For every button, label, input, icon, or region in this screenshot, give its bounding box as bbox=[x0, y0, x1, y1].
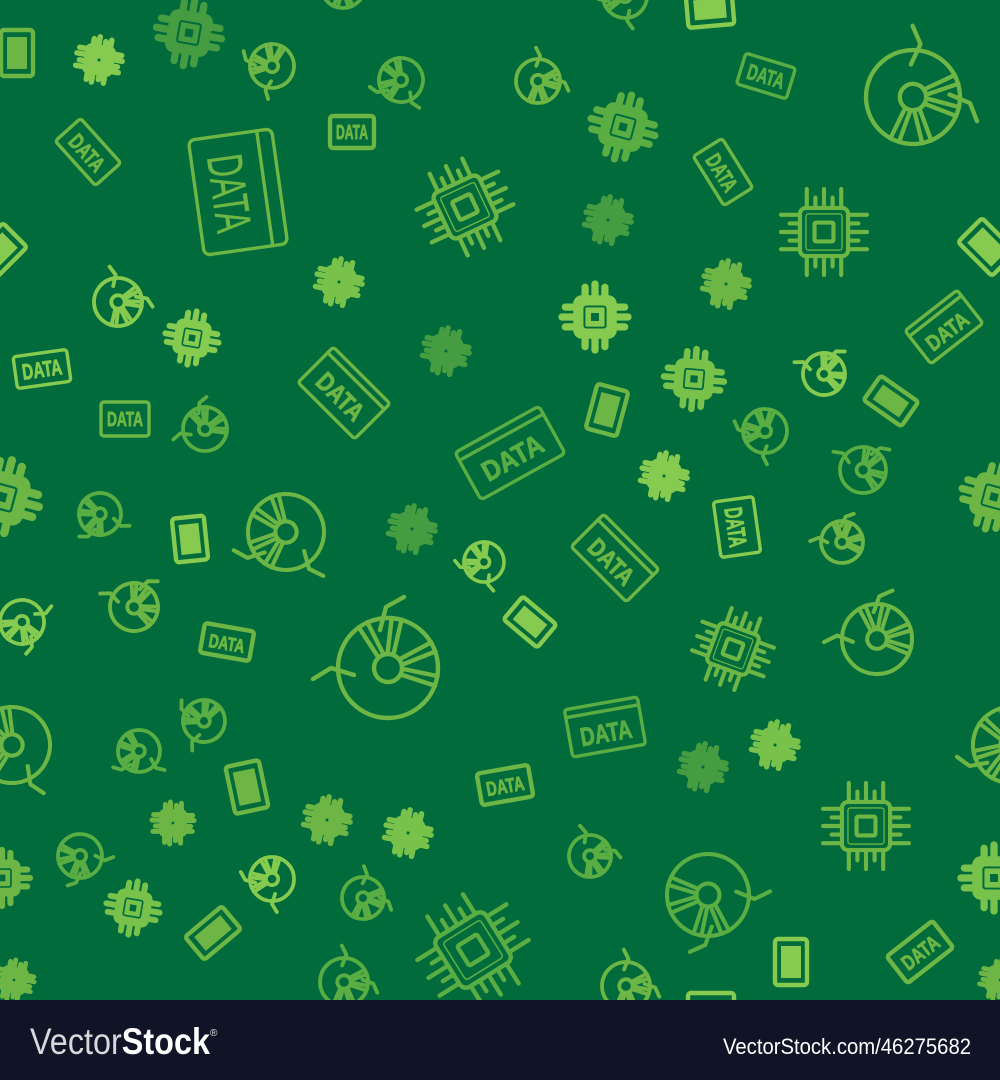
icon: solid card 6 bbox=[225, 760, 269, 814]
icon: small data window lower left bbox=[200, 623, 254, 661]
icon: data window vertical: DATA bbox=[718, 506, 752, 549]
icon: disc bottom right bbox=[662, 851, 773, 958]
footer registered mark: ® bbox=[210, 1028, 218, 1039]
icon: small disc 21 bbox=[600, 948, 663, 1013]
icon: tiny chip 4 bbox=[699, 257, 753, 311]
icon: chip right bbox=[781, 189, 867, 275]
icon: tiny chip 12 bbox=[748, 718, 802, 772]
icon: small disc top edge 1 bbox=[592, 0, 650, 32]
icon: data window lower centre: DATA bbox=[578, 714, 634, 752]
icon: small disc 1 bbox=[233, 37, 299, 104]
icon: data window right: DATA bbox=[921, 307, 974, 356]
icon: tiny chip 11 bbox=[676, 740, 730, 794]
icon: small disc 3 bbox=[514, 46, 572, 106]
icon: data window vertical bbox=[713, 496, 761, 558]
icon: chip bottom centre bbox=[401, 878, 545, 1022]
icon: filled chip left edge bbox=[0, 450, 49, 544]
icon: tiny chip 1 bbox=[72, 33, 126, 87]
icon: chip centre top bbox=[405, 147, 525, 267]
icon: data window lower centre bbox=[564, 697, 646, 757]
icon: solid card 9 bbox=[686, 0, 734, 28]
footer bar bbox=[0, 1000, 1000, 1080]
icon: small disc 20 bbox=[318, 944, 381, 1009]
icon: small data window upper: DATA bbox=[336, 122, 368, 144]
icon: chip middle right bbox=[684, 600, 782, 698]
icon: filled chip bottom left bbox=[102, 877, 164, 939]
icon: filled chip lower left edge bbox=[0, 850, 30, 906]
icon: small data window top: DATA bbox=[744, 59, 788, 94]
icon: solid card 7 bbox=[185, 906, 241, 960]
icon: wide data window centre: DATA bbox=[476, 428, 549, 487]
icon: tiny chip 5 bbox=[419, 324, 473, 378]
icon: small disc 15 bbox=[103, 721, 176, 794]
icon: small disc 14 bbox=[162, 688, 233, 759]
icon: solid card 4 bbox=[172, 515, 208, 563]
icon: tiny chip 2 bbox=[312, 255, 366, 309]
icon: small disc 18 bbox=[339, 863, 398, 924]
icon: disc right bbox=[822, 585, 916, 677]
icon: tiny chip 6 bbox=[385, 502, 439, 556]
icon: small data window bottom right: DATA bbox=[897, 931, 945, 975]
icon: solid card 5 bbox=[864, 376, 918, 426]
icon: filled chip centre right bbox=[661, 346, 727, 412]
icon: large outlined data window bbox=[188, 129, 288, 255]
icon: small disc 8 bbox=[822, 423, 902, 502]
icon: small disc 17 bbox=[241, 857, 294, 912]
icon: small disc 19 bbox=[564, 820, 623, 880]
icon: small disc 10 bbox=[91, 559, 172, 640]
icon: data window right bbox=[905, 290, 983, 364]
icon: small disc 7 bbox=[731, 406, 789, 466]
icon: small disc 12 bbox=[453, 539, 509, 596]
icon: solid card 11 bbox=[0, 223, 27, 281]
icon: data window middle: DATA bbox=[582, 533, 640, 591]
icon: small disc 6 bbox=[786, 332, 857, 403]
icon: solid card 3 bbox=[586, 384, 628, 436]
icon: small data window mid left bbox=[101, 402, 149, 436]
icon: disc centre left bbox=[220, 480, 348, 609]
icon: solid card 12 bbox=[688, 993, 734, 1023]
icon: tiny chip 10 bbox=[381, 806, 435, 860]
icon: small disc top edge 2 bbox=[319, 0, 377, 11]
icon: filled chip lower right edge bbox=[961, 845, 1000, 911]
icon: small data window lower left: DATA bbox=[207, 631, 246, 658]
icon: tiny chip 7 bbox=[637, 449, 691, 503]
icon: small data window bottom right bbox=[887, 921, 953, 983]
icon: tiny chip 14 bbox=[976, 956, 1000, 1004]
icon: solid card 2 bbox=[504, 596, 556, 648]
icon: small data window left: DATA bbox=[21, 354, 64, 385]
icon: filled chip right edge bbox=[954, 457, 1000, 537]
icon: small data window mid left: DATA bbox=[107, 409, 143, 431]
icon: small disc 2 bbox=[363, 51, 435, 123]
icon: small data window bottom: DATA bbox=[485, 773, 526, 801]
icon: filled chip centre bbox=[562, 284, 628, 350]
icon: small data window upper bbox=[330, 116, 374, 148]
icon: tiny chip 3 bbox=[581, 193, 635, 247]
icon: data window top left: DATA bbox=[64, 129, 110, 177]
icon: data window left centre bbox=[298, 347, 390, 439]
icon: large disc centre bbox=[313, 597, 438, 718]
icon: small data window top bbox=[736, 53, 796, 99]
icon: data window top right: DATA bbox=[701, 149, 743, 196]
icon: small disc 9 bbox=[67, 485, 138, 556]
icon: large outlined data window: DATA bbox=[196, 151, 262, 236]
icon: solid card 10 bbox=[958, 218, 1000, 276]
footer image id: VectorStock.com/46275682 bbox=[723, 1034, 971, 1059]
icon: filled chip left bbox=[161, 307, 223, 369]
icon: data window middle bbox=[571, 514, 659, 602]
icon: small disc 4 bbox=[91, 263, 154, 328]
icon: solid card 1 bbox=[1, 30, 33, 76]
icon: small disc 11 bbox=[0, 590, 64, 659]
icon: filled chip top left bbox=[151, 0, 227, 71]
icon: filled chip top bbox=[583, 87, 663, 167]
icon: tiny chip 13 bbox=[0, 956, 38, 1004]
icon: small disc 13 bbox=[807, 507, 868, 566]
icon: large disc top right bbox=[860, 21, 989, 153]
footer logo: VectorStock bbox=[30, 1021, 210, 1062]
icon: disc left edge bbox=[0, 695, 71, 819]
icon: disc right edge bbox=[946, 695, 1000, 819]
icon: small disc 16 bbox=[53, 831, 116, 892]
icon: small data window bottom bbox=[477, 765, 533, 805]
icon: small data window left bbox=[13, 349, 71, 389]
icon: tiny chip 9 bbox=[300, 793, 354, 847]
icon: data window top right bbox=[693, 138, 753, 206]
icon: small disc 5 bbox=[167, 394, 230, 456]
icon: wide data window centre bbox=[455, 406, 565, 500]
icon: data window left centre: DATA bbox=[310, 366, 371, 427]
icon: solid card 8 bbox=[775, 939, 807, 985]
icon: chip lower right bbox=[823, 783, 909, 869]
icon: tiny chip 8 bbox=[152, 802, 194, 844]
